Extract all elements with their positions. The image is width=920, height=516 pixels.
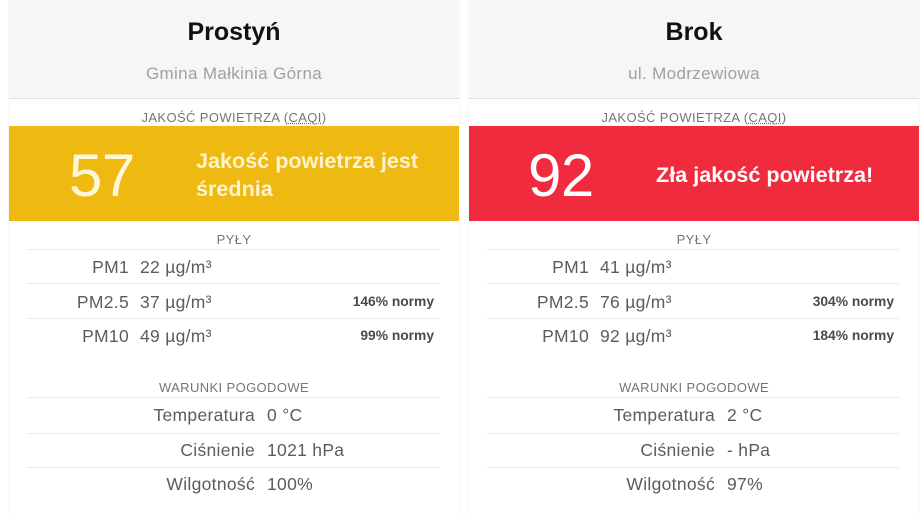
heading: city: Brok xyxy=(666,18,722,46)
norm PM2.5: 304% normy xyxy=(813,294,894,309)
norm PM10: 184% normy xyxy=(813,328,894,343)
header background xyxy=(469,0,919,99)
value pressure: 1021 hPa xyxy=(267,440,344,460)
panel: Prostyń xyxy=(9,0,459,516)
caption: dust: PYŁY xyxy=(677,232,711,247)
value humidity: 100% xyxy=(267,474,313,494)
value temperature: 0 °C xyxy=(267,405,302,425)
label humidity: Wilgotność xyxy=(166,474,255,494)
caption: weather: WARUNKI POGODOWE xyxy=(159,380,309,395)
header background xyxy=(9,0,459,99)
label pressure: Ciśnienie xyxy=(180,440,255,460)
norm PM10: 99% normy xyxy=(360,328,434,343)
CAQI value: 92 xyxy=(528,142,594,209)
label PM10: PM10 xyxy=(82,326,129,346)
value PM10: 49 µg/m³ xyxy=(140,326,212,346)
label PM1: PM1 xyxy=(552,257,589,277)
value pressure: - hPa xyxy=(727,440,770,460)
value PM1: 41 µg/m³ xyxy=(600,257,672,277)
status message: średnia xyxy=(196,176,273,201)
heading: city: Prostyń xyxy=(187,18,281,46)
value PM1: 22 µg/m³ xyxy=(140,257,212,277)
location subtitle: Gmina Małkinia Górna xyxy=(146,64,322,83)
label humidity: Wilgotność xyxy=(626,474,715,494)
label pressure: Ciśnienie xyxy=(640,440,715,460)
status bar: yellow xyxy=(9,126,459,221)
label temperature: Temperatura xyxy=(153,405,255,425)
norm PM2.5: 146% normy xyxy=(353,294,434,309)
value temperature: 2 °C xyxy=(727,405,762,425)
value PM2.5: 37 µg/m³ xyxy=(140,292,212,312)
panel: Brok xyxy=(469,0,919,516)
status message: Jakość powietrza jest xyxy=(196,148,418,173)
value PM10: 92 µg/m³ xyxy=(600,326,672,346)
label PM1: PM1 xyxy=(92,257,129,277)
status bar: red xyxy=(469,126,919,221)
location subtitle: ul. Modrzewiowa xyxy=(628,64,760,83)
status message: Zła jakość powietrza! xyxy=(656,162,873,187)
label PM2.5: PM2.5 xyxy=(537,292,589,312)
status message xyxy=(196,148,418,201)
value humidity: 97% xyxy=(727,474,763,494)
CAQI value: 57 xyxy=(69,142,135,209)
caption: weather: WARUNKI POGODOWE xyxy=(619,380,769,395)
label PM10: PM10 xyxy=(542,326,589,346)
caption: air quality: JAKOŚĆ POWIETRZA (CAQI) xyxy=(602,110,786,125)
caption: air quality: JAKOŚĆ POWIETRZA (CAQI) xyxy=(142,110,326,125)
label temperature: Temperatura xyxy=(613,405,715,425)
value PM2.5: 76 µg/m³ xyxy=(600,292,672,312)
label PM2.5: PM2.5 xyxy=(77,292,129,312)
caption: dust: PYŁY xyxy=(217,232,251,247)
